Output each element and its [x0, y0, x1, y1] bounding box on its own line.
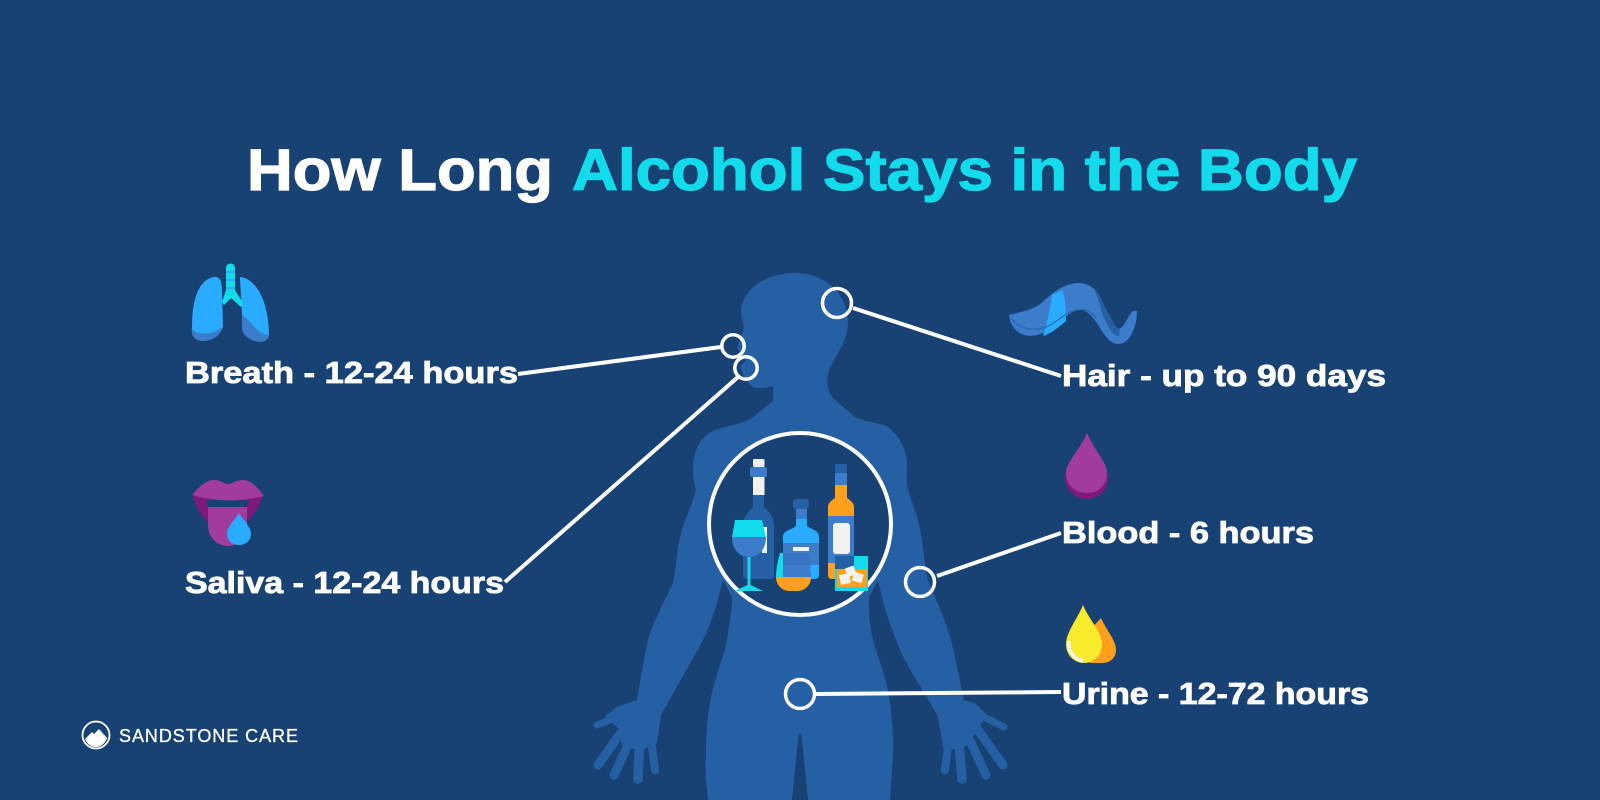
marker: blood [906, 568, 934, 596]
leader line: breath [518, 347, 721, 374]
icon: hair strand [1009, 283, 1137, 344]
left hand [597, 700, 661, 779]
label: urine: Urine - 12-72 hours [1062, 677, 1369, 711]
icon: blue bottle [783, 499, 819, 579]
title [247, 138, 1357, 203]
icon: urine drops [1066, 605, 1116, 663]
icon: round glass [776, 553, 811, 591]
leader line: urine [816, 692, 1061, 694]
icon: wine glass [732, 520, 766, 591]
icon: lungs [192, 264, 269, 342]
marker: breath [722, 335, 744, 357]
label: saliva: Saliva - 12-24 hours [185, 566, 504, 600]
icon: wine bottle [743, 459, 774, 579]
marker: saliva [735, 357, 757, 379]
label: breath: Breath - 12-24 hours [185, 356, 518, 390]
logo: Sandstone Care [82, 722, 298, 748]
logo: Sandstone Care: SANDSTONE CARE [119, 726, 298, 746]
leader line: blood [937, 533, 1061, 576]
body silhouette [597, 273, 1004, 800]
title: Alcohol Stays in the Body [572, 138, 1357, 203]
right hand [938, 700, 1004, 779]
leader line: saliva [505, 377, 738, 582]
marker: hair [822, 288, 852, 318]
leader line: hair [853, 308, 1061, 376]
label: blood: Blood - 6 hours [1062, 516, 1314, 550]
label: hair: Hair - up to 90 days [1062, 359, 1386, 393]
marker: urine [786, 680, 814, 708]
title: How Long [247, 138, 553, 203]
icon: whiskey bottle [828, 464, 854, 579]
icon: mouth and tongue [192, 480, 264, 546]
icon: whiskey tumbler with ice [835, 556, 868, 591]
panel: alcohol bottles circle [709, 433, 891, 615]
icon: blood drop [1065, 433, 1108, 499]
